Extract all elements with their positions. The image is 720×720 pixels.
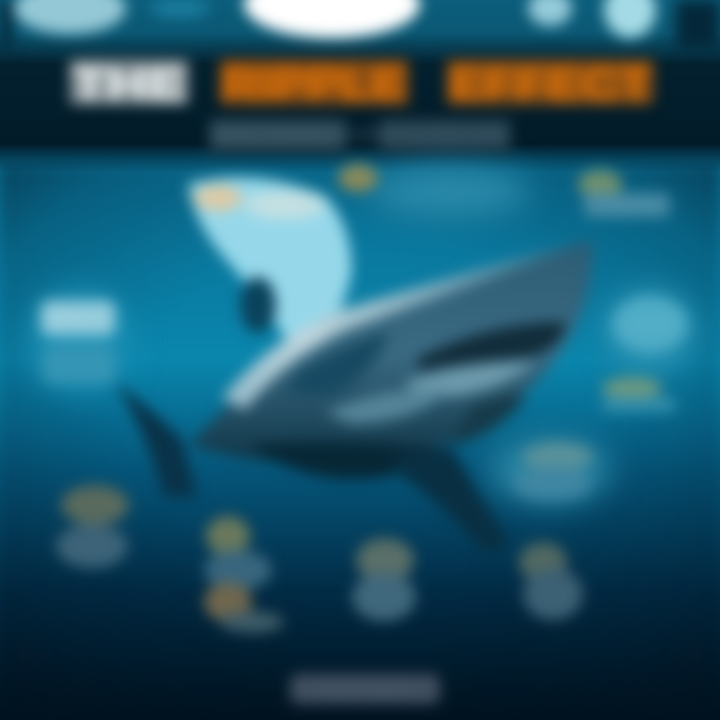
shark illustration bbox=[116, 177, 592, 554]
subtitle: Why sharks matter to the sea bbox=[212, 124, 509, 144]
callout: bottom centre bbox=[352, 538, 416, 621]
shark mouth bbox=[418, 322, 566, 370]
shark tail bbox=[116, 383, 197, 497]
shark body bbox=[190, 240, 592, 465]
callout: left: Balance bbox=[51, 309, 105, 325]
callout: right lower: Habitat bbox=[541, 450, 575, 462]
callout: bottom far left: Fisheries bbox=[71, 498, 119, 512]
subtitle bbox=[210, 120, 510, 150]
callout: bottom left upper: Seagrass bbox=[205, 530, 252, 542]
title: EFFECT bbox=[449, 58, 651, 110]
title bbox=[70, 58, 653, 110]
footer text bbox=[290, 674, 440, 704]
callout: left bbox=[40, 300, 116, 384]
callout: bottom right: Oceans bbox=[524, 557, 562, 569]
callout: right upper bbox=[612, 296, 688, 352]
callout: bottom left upper bbox=[204, 516, 272, 590]
callout: bottom far left bbox=[56, 485, 129, 568]
callout: top right: Food web bbox=[606, 200, 650, 211]
callout: bottom left lower: Climate bbox=[209, 597, 247, 609]
light glow across the water bbox=[30, 168, 694, 502]
callout: top centre: Apex bbox=[347, 174, 369, 185]
shark back highlight bbox=[222, 246, 570, 410]
shark flank shadow bbox=[285, 332, 390, 396]
callout: bottom centre: Tourism bbox=[366, 555, 404, 567]
footer text: Save sharks bbox=[321, 682, 409, 699]
shark jaw bbox=[405, 362, 536, 398]
shark belly bbox=[325, 390, 450, 424]
shark underside bbox=[250, 441, 445, 479]
callout: bottom right bbox=[519, 542, 583, 620]
title: RIPPLE bbox=[222, 58, 406, 110]
callout: bottom left lower bbox=[204, 582, 284, 633]
callout: top centre bbox=[338, 164, 378, 192]
title: THE bbox=[72, 58, 186, 110]
vignette bbox=[0, 165, 720, 720]
shark dorsal fin bbox=[188, 177, 352, 345]
shark pectoral fin bbox=[395, 448, 510, 554]
callout: right middle bbox=[602, 377, 676, 412]
background: sea surface with light bbox=[0, 0, 720, 50]
callout: right upper: Reefs bbox=[634, 317, 666, 331]
callout: right middle: Prey bbox=[621, 383, 644, 395]
callout: right lower bbox=[512, 441, 594, 501]
callout: top right bbox=[578, 170, 670, 217]
